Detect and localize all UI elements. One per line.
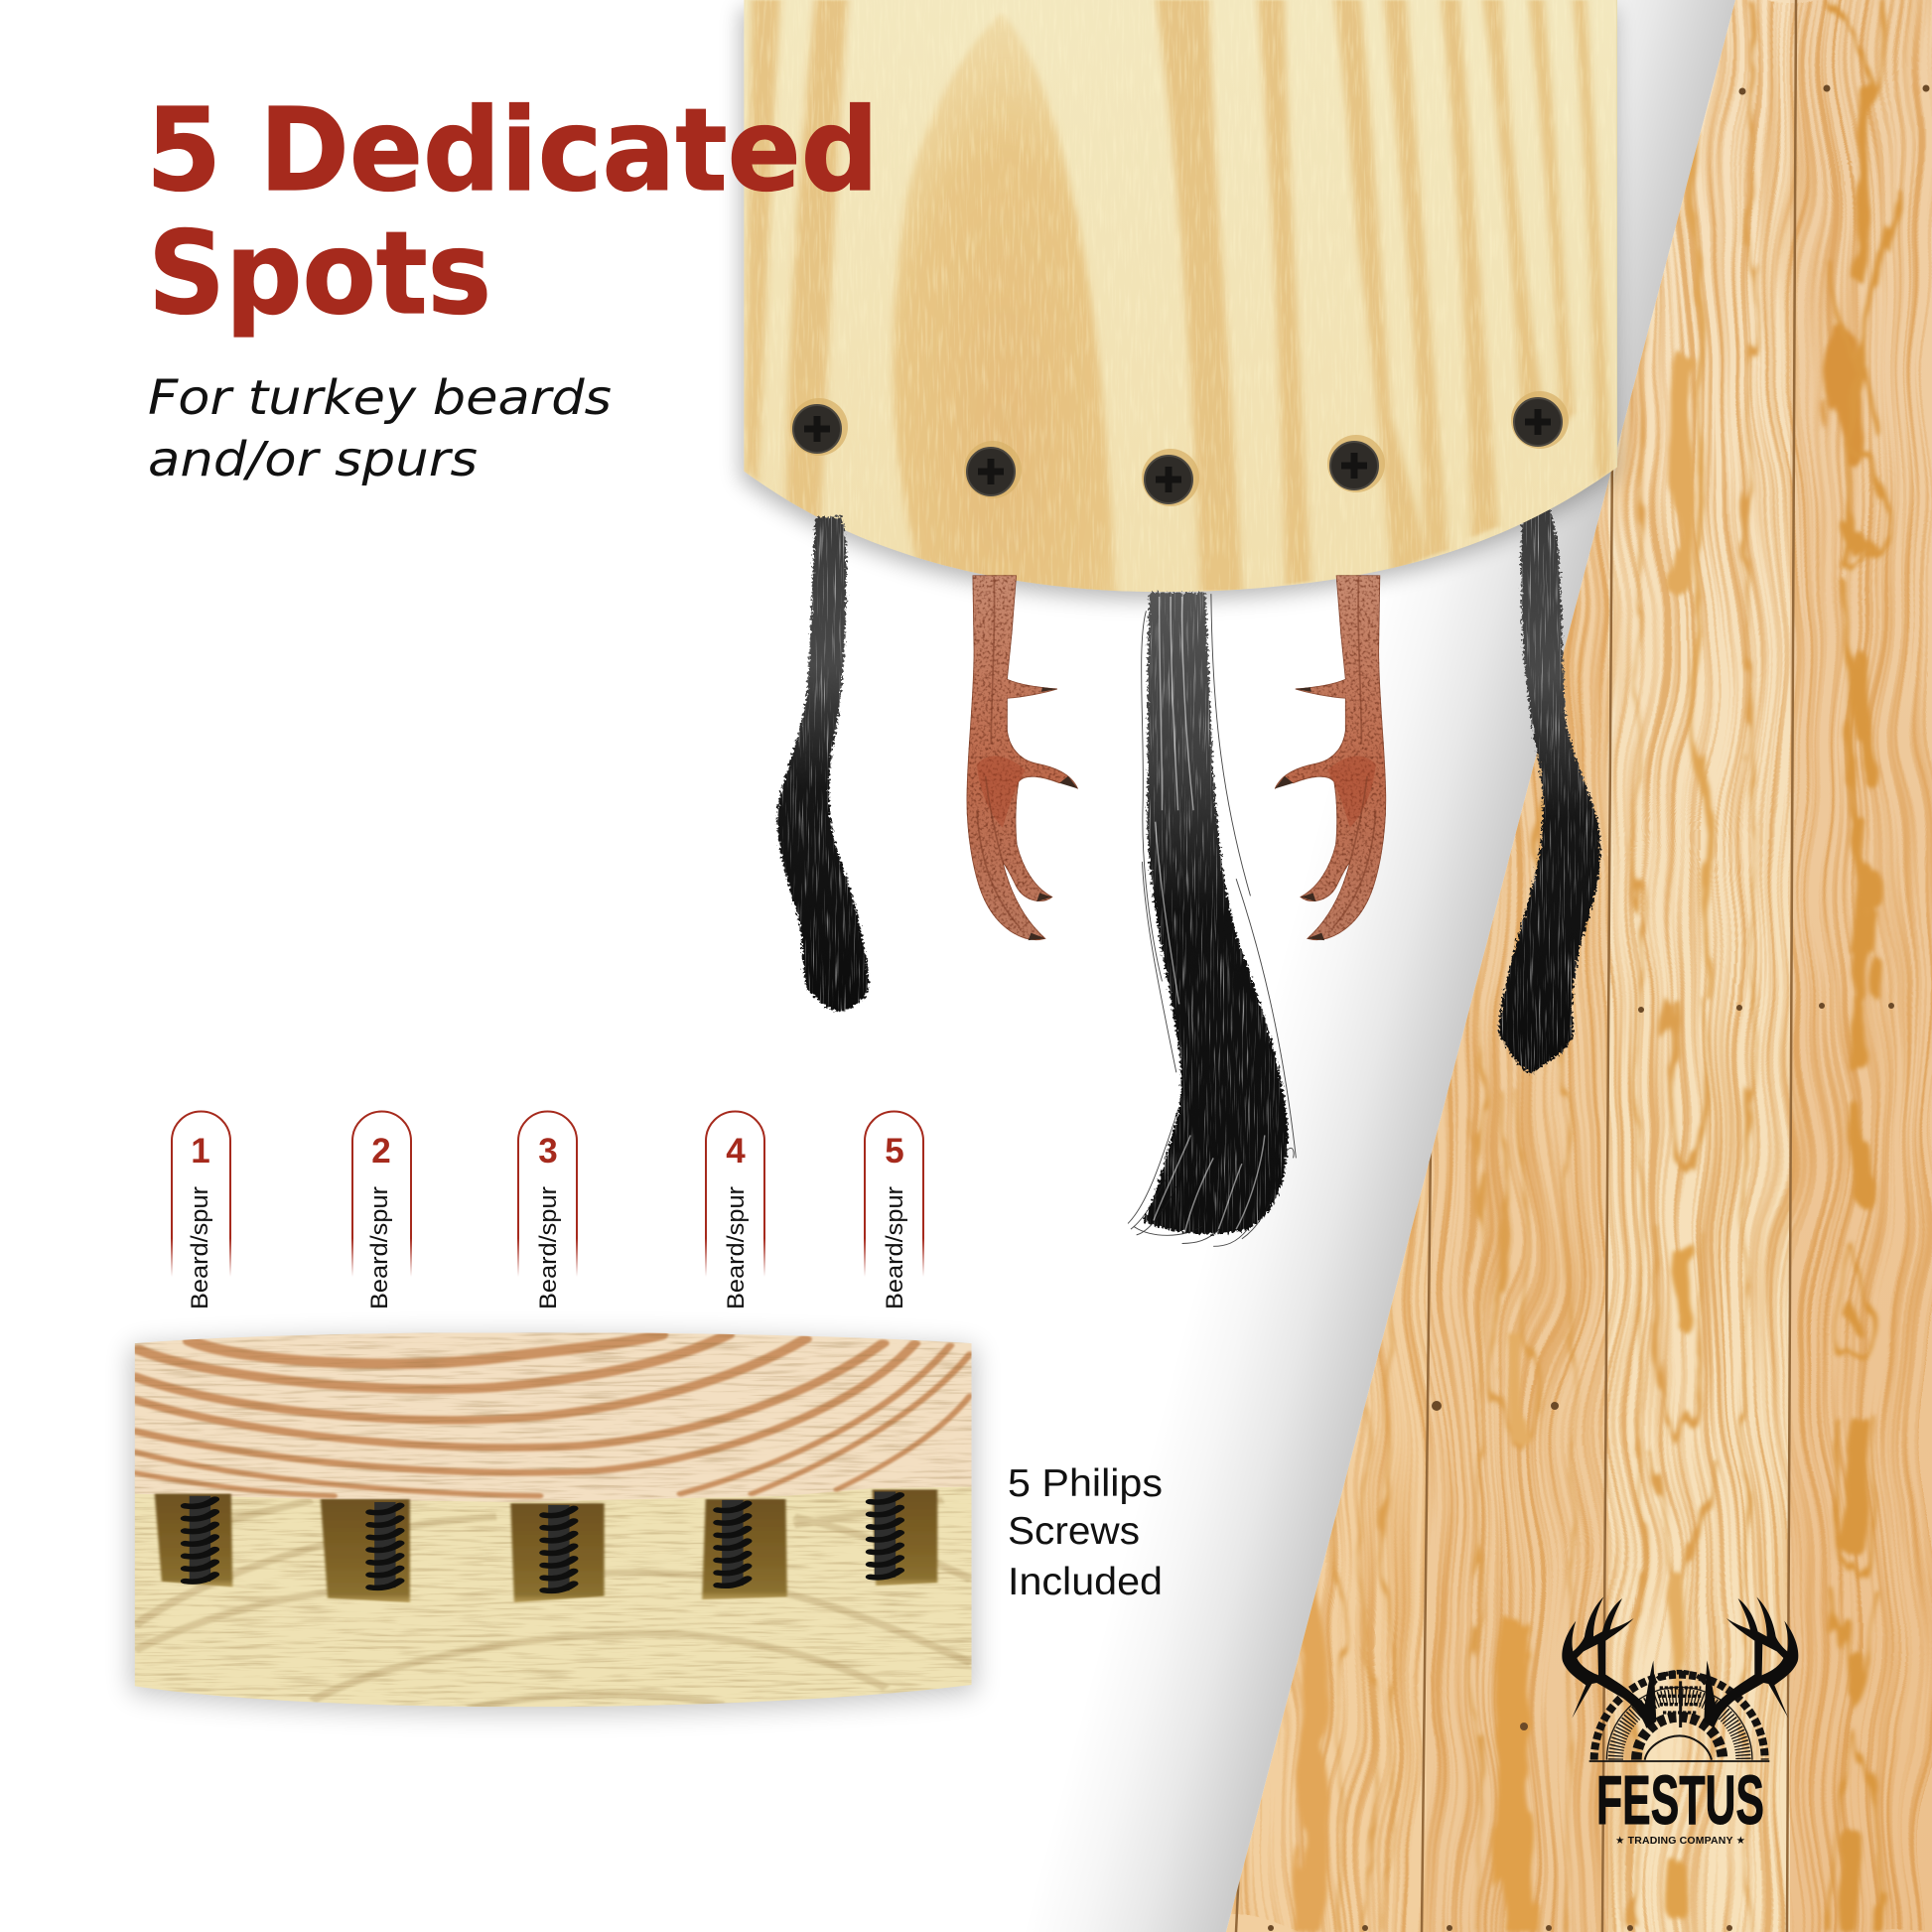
panel: wood block with screw slots [128, 1328, 979, 1722]
cathedral grain patch [893, 12, 1116, 593]
label pill 2: Beard/spur [366, 1186, 393, 1310]
subheading: and/or spurs [148, 432, 478, 487]
icon: right antler [1704, 1596, 1798, 1728]
screw 4 [1327, 435, 1385, 492]
label pill 1: 1 [191, 1132, 210, 1171]
screw 1 [790, 398, 848, 456]
heading: 5 Dedicated Spots [146, 84, 879, 341]
panel: pine wood board [735, 0, 1628, 597]
subheading [148, 370, 612, 487]
screw slot 2 [321, 1499, 410, 1602]
lower face [128, 1479, 979, 1722]
label pill 5 [865, 1112, 923, 1310]
callout: 5 Philips Screws Included: Screws [1008, 1510, 1140, 1553]
screw 3 [1142, 449, 1199, 506]
screw slot 1 [155, 1494, 232, 1587]
label pill 5: 5 [885, 1132, 904, 1171]
screws in board [790, 391, 1569, 506]
callout: 5 Philips Screws Included: 5 Philips [1008, 1462, 1163, 1505]
panel: wood planks background [1191, 0, 1932, 1932]
top face [128, 1333, 979, 1502]
screw slot 4 [702, 1499, 787, 1599]
label pill 4 [706, 1112, 764, 1310]
label pill 1: Beard/spur [187, 1186, 213, 1310]
logo: Festus Trading Company: ★ TRADING COMPANY ★ [1615, 1835, 1745, 1847]
label pill 2: 2 [371, 1132, 391, 1171]
beard: far right, hanging below board [1498, 505, 1600, 1073]
label pill 3: 3 [538, 1132, 558, 1171]
screw slot 3 [510, 1503, 605, 1602]
icon: left antler [1562, 1596, 1656, 1728]
turkey spur leg: right [1275, 576, 1386, 940]
label pill 2 [352, 1112, 411, 1310]
label pill 4: 4 [726, 1132, 746, 1171]
subheading: For turkey beards [148, 370, 612, 426]
turkey spur leg: left [967, 576, 1078, 940]
screw 2 [964, 441, 1022, 498]
label pill 5: Beard/spur [882, 1186, 908, 1310]
callout: 5 Philips Screws Included [1008, 1462, 1163, 1603]
label pill 3: Beard/spur [535, 1186, 562, 1310]
logo: Festus Trading Company [1562, 1596, 1798, 1847]
screw slot 5 [870, 1489, 937, 1586]
vertical grain streaks [746, 0, 1611, 591]
plank panel cast shadow [993, 0, 1735, 1932]
icon: turkey fan [1589, 1672, 1769, 1761]
logo: Festus Trading Company: FESTUS [1596, 1761, 1764, 1839]
label pill 3 [518, 1112, 577, 1310]
screw 5 [1511, 391, 1569, 449]
heading: 5 Dedicated Spots: 5 Dedicated [146, 84, 879, 217]
board drop shadow [741, 8, 1614, 600]
beard: centre [1128, 593, 1296, 1246]
callout: 5 Philips Screws Included: Included [1008, 1561, 1163, 1603]
heading: 5 Dedicated Spots: Spots [148, 207, 491, 341]
label pill 1 [172, 1112, 230, 1310]
beard: left [777, 517, 869, 1012]
block drop shadow [130, 1336, 976, 1714]
label pill 4: Beard/spur [723, 1186, 750, 1310]
